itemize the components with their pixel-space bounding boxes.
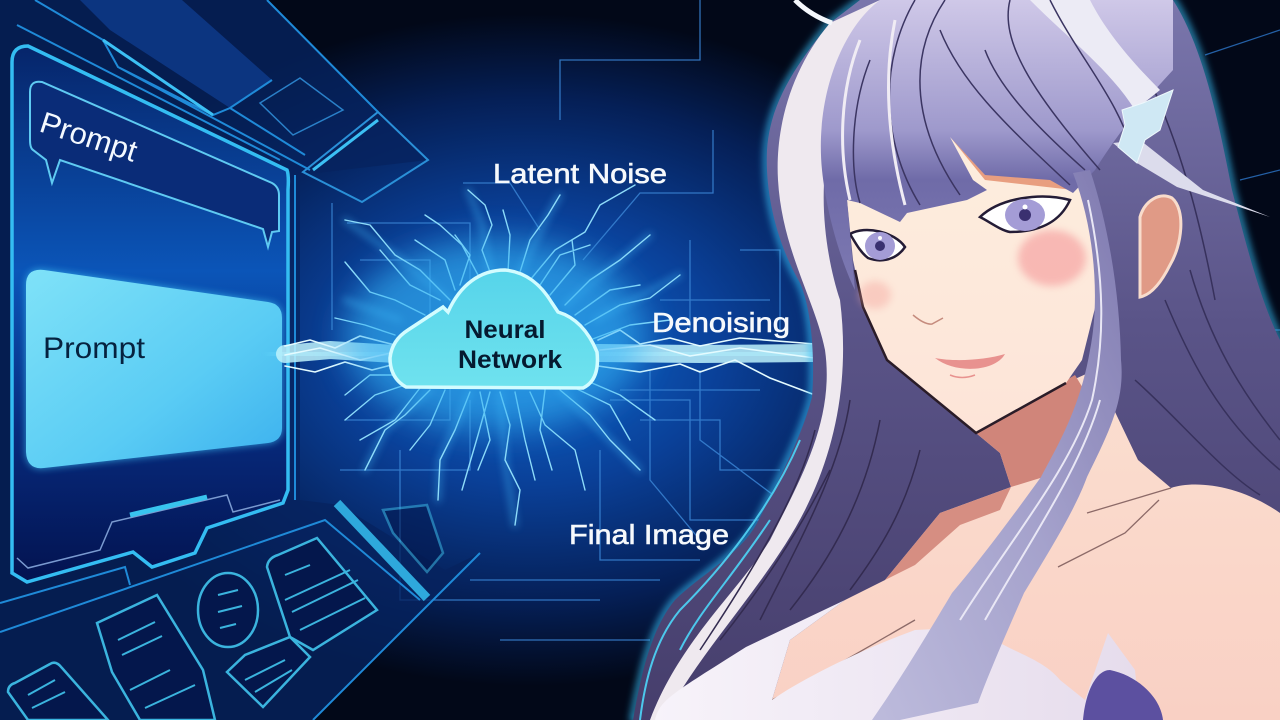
body xyxy=(770,370,1280,720)
lower accent bar xyxy=(337,503,427,598)
icon card: right xyxy=(267,538,377,650)
flower ornament xyxy=(1083,670,1163,720)
hair dark left strands xyxy=(700,400,920,650)
panel inner bottom line xyxy=(17,495,280,568)
prompt highlighted screen xyxy=(26,270,282,468)
illustration: anime woman xyxy=(633,0,1280,720)
neural network cloud: Network xyxy=(458,346,562,374)
lock strands xyxy=(960,200,1101,620)
panel: left control wall xyxy=(0,0,480,720)
icon: circle dial xyxy=(198,573,258,647)
hair back xyxy=(633,0,1280,720)
prompt label main: Prompt xyxy=(43,332,146,365)
nose xyxy=(913,315,943,324)
eye: left xyxy=(850,230,905,260)
blush xyxy=(1018,230,1086,286)
white top xyxy=(655,600,1140,720)
mouth xyxy=(935,354,1005,369)
white crown band xyxy=(1030,0,1160,110)
lightning branches glow xyxy=(345,190,680,525)
hair ribbon xyxy=(1113,140,1270,217)
left hair cyan strands xyxy=(640,440,800,720)
wall shading xyxy=(0,0,480,720)
eye: right xyxy=(980,197,1070,232)
icon card: small xyxy=(383,505,443,572)
panel outline xyxy=(12,46,288,582)
icon card: lower xyxy=(227,637,310,707)
collar lines xyxy=(772,488,1171,700)
bangs xyxy=(821,0,1173,290)
butterfly hair clip xyxy=(1118,90,1173,163)
stream glow xyxy=(285,353,815,355)
jaw line xyxy=(855,270,1066,433)
lower control icons xyxy=(8,505,443,720)
neural network cloud xyxy=(390,270,597,388)
prompt label top: Prompt xyxy=(36,106,142,169)
neck shadow xyxy=(976,375,1090,487)
face xyxy=(847,130,1097,433)
hair outline glow xyxy=(633,0,1280,720)
icon card: middle xyxy=(97,595,215,720)
energy streams xyxy=(285,185,815,525)
stream core xyxy=(285,350,815,354)
label: final image: Final Image xyxy=(569,519,729,550)
label: denoising: Denoising xyxy=(652,307,790,338)
lightning branches xyxy=(335,185,680,525)
label: latent noise: Latent Noise xyxy=(493,158,667,189)
front hair lock xyxy=(872,170,1122,720)
panel bottom bar xyxy=(130,497,207,515)
forehead shade xyxy=(947,133,1073,190)
upper band xyxy=(80,0,272,108)
cloud glow xyxy=(345,240,645,430)
icon card: left xyxy=(8,663,108,720)
prompt input box xyxy=(30,82,279,247)
hair back strands right xyxy=(1135,60,1280,495)
background circuit lines xyxy=(332,0,1280,640)
halo arc xyxy=(795,0,832,23)
hair strands xyxy=(843,0,1135,205)
hair left highlight xyxy=(650,0,880,720)
frame lines xyxy=(0,0,480,720)
ear xyxy=(1140,196,1181,297)
cloud label: Neural xyxy=(464,316,546,344)
